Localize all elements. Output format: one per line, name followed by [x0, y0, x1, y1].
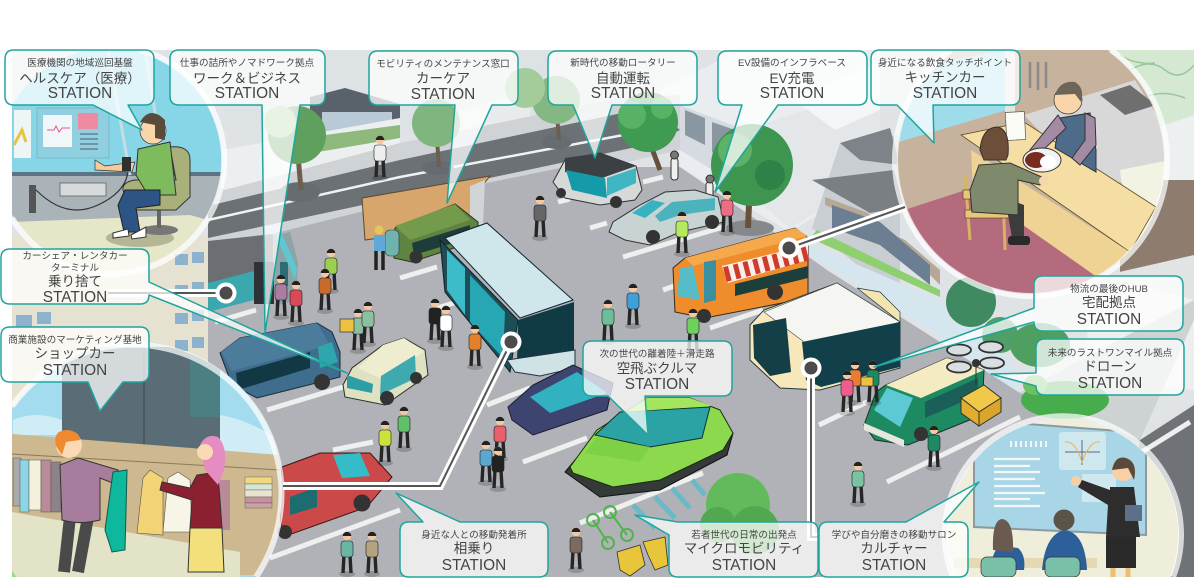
connector: kitchen car: [778, 207, 905, 258]
callout: EV charging: [715, 51, 867, 192]
plate of curry: [1023, 148, 1061, 172]
vehicle: food truck: [673, 228, 808, 323]
figure: cook serving curry: [1030, 82, 1096, 172]
callout: flying car: [583, 341, 732, 435]
white building upper right: [660, 50, 880, 232]
vehicle: autonomous shuttle: [553, 153, 642, 208]
vehicle: silver EV car: [609, 190, 724, 245]
figure: customer on chair: [963, 127, 1049, 250]
callout: kitchen car: キッチンカー: [904, 70, 986, 85]
yellow scooters: [617, 537, 668, 576]
vehicle: navy flying car: [508, 365, 613, 435]
vehicle: blue van: [220, 323, 340, 398]
callout: healthcare: 医療機関の地域巡回基盤: [27, 57, 133, 69]
micro mobility: bikes and scooters: [587, 480, 705, 549]
callout: kitchen car: [871, 50, 1020, 143]
callout: drone: ドローン: [1083, 359, 1137, 374]
callout: culture: [819, 482, 979, 577]
callout: micro mobility: STATION: [712, 557, 776, 574]
tree: rotary: [618, 92, 678, 170]
inset: healthcare: [12, 50, 225, 275]
drone and parcel: [947, 342, 1004, 426]
callout: delivery hub: [874, 276, 1183, 367]
parking markings: [215, 177, 1190, 558]
callout: ride sharing: STATION: [442, 557, 506, 574]
inset: culture: [940, 410, 1185, 577]
callout: kitchen car: STATION: [913, 85, 977, 102]
share station building with teal windows: [208, 232, 298, 312]
callout: one-way rental: STATION: [43, 289, 107, 306]
callout: shop car: [1, 327, 149, 411]
callout: EV charging: EV充電: [769, 71, 815, 86]
vehicle: delivery van with parcel: [864, 358, 984, 447]
callout: delivery hub: 物流の最後のHUB: [1070, 283, 1148, 295]
bush bottom center: [700, 473, 779, 554]
vehicle: cream car: [343, 338, 428, 405]
tree: work station: [264, 106, 326, 202]
callout: autonomous driving: 自動運転: [596, 71, 650, 86]
tree: auto station: [505, 68, 580, 149]
vehicle: delivery bus: [750, 283, 900, 390]
figure: seated patient: [95, 113, 190, 239]
tall building left: [12, 235, 208, 415]
callout: ride sharing: [396, 493, 548, 577]
callout: kitchen car: 身近になる飲食タッチポイント: [878, 57, 1012, 69]
connector: culture: [800, 358, 822, 537]
figure: shopper with pink hair: [160, 436, 225, 572]
callout: culture: カルチャー: [860, 541, 928, 556]
callout: healthcare: [5, 50, 154, 130]
callout: one-way rental: カーシェア・レンタカー: [22, 251, 128, 262]
vehicle: olive van: [394, 204, 478, 264]
vehicle: autonomous bus: [440, 223, 575, 376]
callout: autonomous driving: 新時代の移動ロータリー: [570, 57, 676, 69]
callout: flying car: 空飛ぶクルマ: [617, 361, 697, 376]
callout: shop car: STATION: [43, 362, 107, 379]
figure: shopper with orange hair: [55, 430, 118, 572]
callout: one-way rental: ターミナル: [51, 263, 99, 274]
callout: drone: STATION: [1078, 375, 1142, 392]
callout: healthcare: ヘルスケア（医療）: [19, 71, 141, 86]
callout: car care: モビリティのメンテナンス窓口: [376, 59, 510, 70]
building: upper street blocks: [224, 88, 530, 190]
callout: work and business: [170, 50, 325, 333]
callout: flying car: 次の世代の離着陸＋滑走路: [599, 348, 715, 360]
callout: shop car: 商業施設のマーケティング基地: [8, 334, 142, 346]
figure: lecturer: [1071, 458, 1142, 577]
car care shelter: [362, 176, 490, 240]
vehicle: red car: [278, 453, 392, 539]
teal garment: [105, 470, 127, 552]
EV chargers: [670, 150, 714, 196]
parcel carried by workers: [340, 319, 354, 332]
upper road: [208, 106, 680, 241]
callout: ride sharing: 身近な人との移動発着所: [421, 529, 527, 541]
callout: micro mobility: [635, 515, 818, 577]
tree: car care station: [412, 99, 460, 175]
figure: students: [981, 510, 1087, 577]
right side buildings and green area: [1015, 50, 1194, 577]
callout: delivery hub: 宅配拠点: [1082, 295, 1136, 310]
callout: autonomous driving: STATION: [591, 85, 655, 102]
hedge and shrubs right: [946, 277, 1109, 419]
central plaza pavement: [200, 167, 1140, 577]
callout: work and business: 仕事の詰所やノマドワーク拠点: [180, 57, 315, 69]
callout: flying car: STATION: [625, 376, 689, 393]
houses with dark roofs: [795, 128, 1020, 392]
callout: drone: 未来のラストワンマイル拠点: [1048, 347, 1173, 359]
callout: healthcare: STATION: [48, 85, 112, 102]
callout: one-way rental: 乗り捨て: [48, 274, 102, 289]
callout: EV charging: EV設備のインフラベース: [738, 57, 846, 69]
callout: autonomous driving: [548, 51, 697, 158]
connector: ride share: [283, 332, 522, 486]
callout: EV charging: STATION: [760, 85, 824, 102]
trees: [264, 68, 1109, 554]
person: maintenance worker: [374, 226, 399, 270]
callout: shop car: ショップカー: [34, 346, 116, 361]
callout: ride sharing: 相乗り: [454, 541, 494, 556]
bottom-left green strip: [12, 571, 16, 577]
inset: shop car: [12, 343, 285, 577]
inset: kitchen car: [890, 50, 1175, 300]
callout: drone: [991, 339, 1184, 395]
callout: one-way rental: [1, 249, 347, 373]
callout: micro mobility: マイクロモビリティ: [684, 541, 804, 556]
callout: micro mobility: 若者世代の日常の出発点: [691, 529, 797, 541]
callout: work and business: STATION: [215, 85, 279, 102]
callout: culture: 学びや自分磨きの移動サロン: [832, 529, 956, 541]
tree: EV: [711, 124, 793, 236]
connector: share station: [108, 282, 236, 304]
callout: car care: [369, 51, 518, 203]
vehicle: green flying car: [565, 398, 733, 497]
parcel at delivery bus: [861, 377, 873, 386]
callout: delivery hub: STATION: [1077, 311, 1141, 328]
callout: car care: STATION: [411, 86, 475, 103]
callout: work and business: ワーク＆ビジネス: [193, 71, 301, 86]
pedestrians: [273, 136, 942, 577]
callout: car care: カーケア: [416, 71, 470, 86]
callout: culture: STATION: [862, 557, 926, 574]
